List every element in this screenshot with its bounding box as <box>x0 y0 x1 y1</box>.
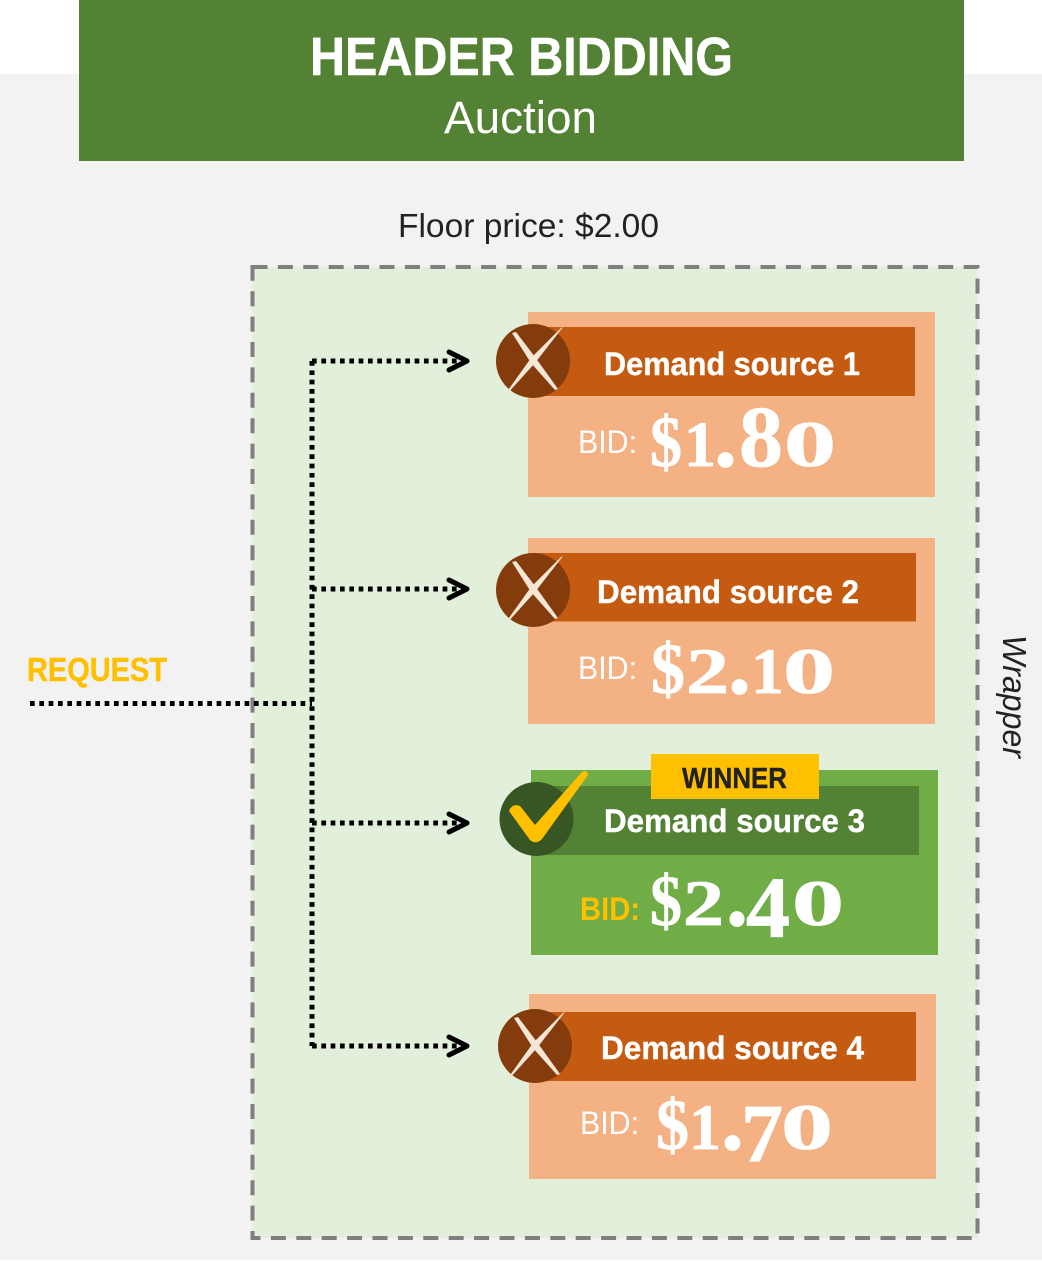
panel: demand source 3 winner <box>500 754 938 956</box>
request flow arrows <box>30 352 467 1055</box>
source name: Demand source 1 <box>604 346 860 382</box>
floor price label: Floor price: $2.00 <box>398 207 659 244</box>
bid amount: $ <box>651 629 685 709</box>
wrapper label: Wrapper <box>996 635 1033 760</box>
bid amount: $ <box>650 861 682 941</box>
panel: wrapper <box>252 267 978 1238</box>
bid amount: 0 <box>781 1092 833 1164</box>
winner badge: WINNER <box>682 763 787 795</box>
bid amount: 4 <box>746 859 790 956</box>
bid amount: . <box>728 611 751 713</box>
bid amount: 2 <box>686 636 729 708</box>
bid label: BID: <box>578 650 637 686</box>
bid amount: 1 <box>689 1092 721 1164</box>
icon: winner check mark <box>500 771 588 856</box>
source name: Demand source 2 <box>597 574 859 610</box>
source name: Demand source 3 <box>604 803 865 839</box>
bid amount: 7 <box>741 1087 783 1179</box>
bid amount: 0 <box>784 409 836 481</box>
panel: demand source 4 <box>498 994 936 1179</box>
winner badge <box>651 754 819 799</box>
bid amount: . <box>714 384 737 486</box>
title: HEADER BIDDING <box>310 27 733 87</box>
bid label: BID: <box>580 891 640 927</box>
bid amount: 2 <box>683 868 724 940</box>
bid amount: $ <box>656 1085 689 1165</box>
bid amount: . <box>721 1067 744 1169</box>
icon: rejected cross <box>496 553 570 627</box>
bid amount: 0 <box>783 636 835 708</box>
bid label: BID: <box>580 1105 639 1141</box>
request label: REQUEST <box>27 651 167 688</box>
bid amount: 8 <box>739 388 783 485</box>
bid label: BID: <box>578 424 637 460</box>
icon: rejected cross <box>498 1009 572 1083</box>
bid amount: . <box>726 843 748 945</box>
bid amount: 1 <box>684 409 716 481</box>
bid amount: 0 <box>792 868 844 940</box>
panel: demand source 1 <box>496 312 935 497</box>
subtitle: Auction <box>444 92 597 143</box>
bid amount: $ <box>650 402 682 482</box>
source name: Demand source 4 <box>601 1030 864 1066</box>
panel: demand source 2 <box>496 538 935 724</box>
bid amount: 1 <box>751 636 784 708</box>
icon: rejected cross <box>496 324 570 398</box>
header banner <box>79 0 964 161</box>
